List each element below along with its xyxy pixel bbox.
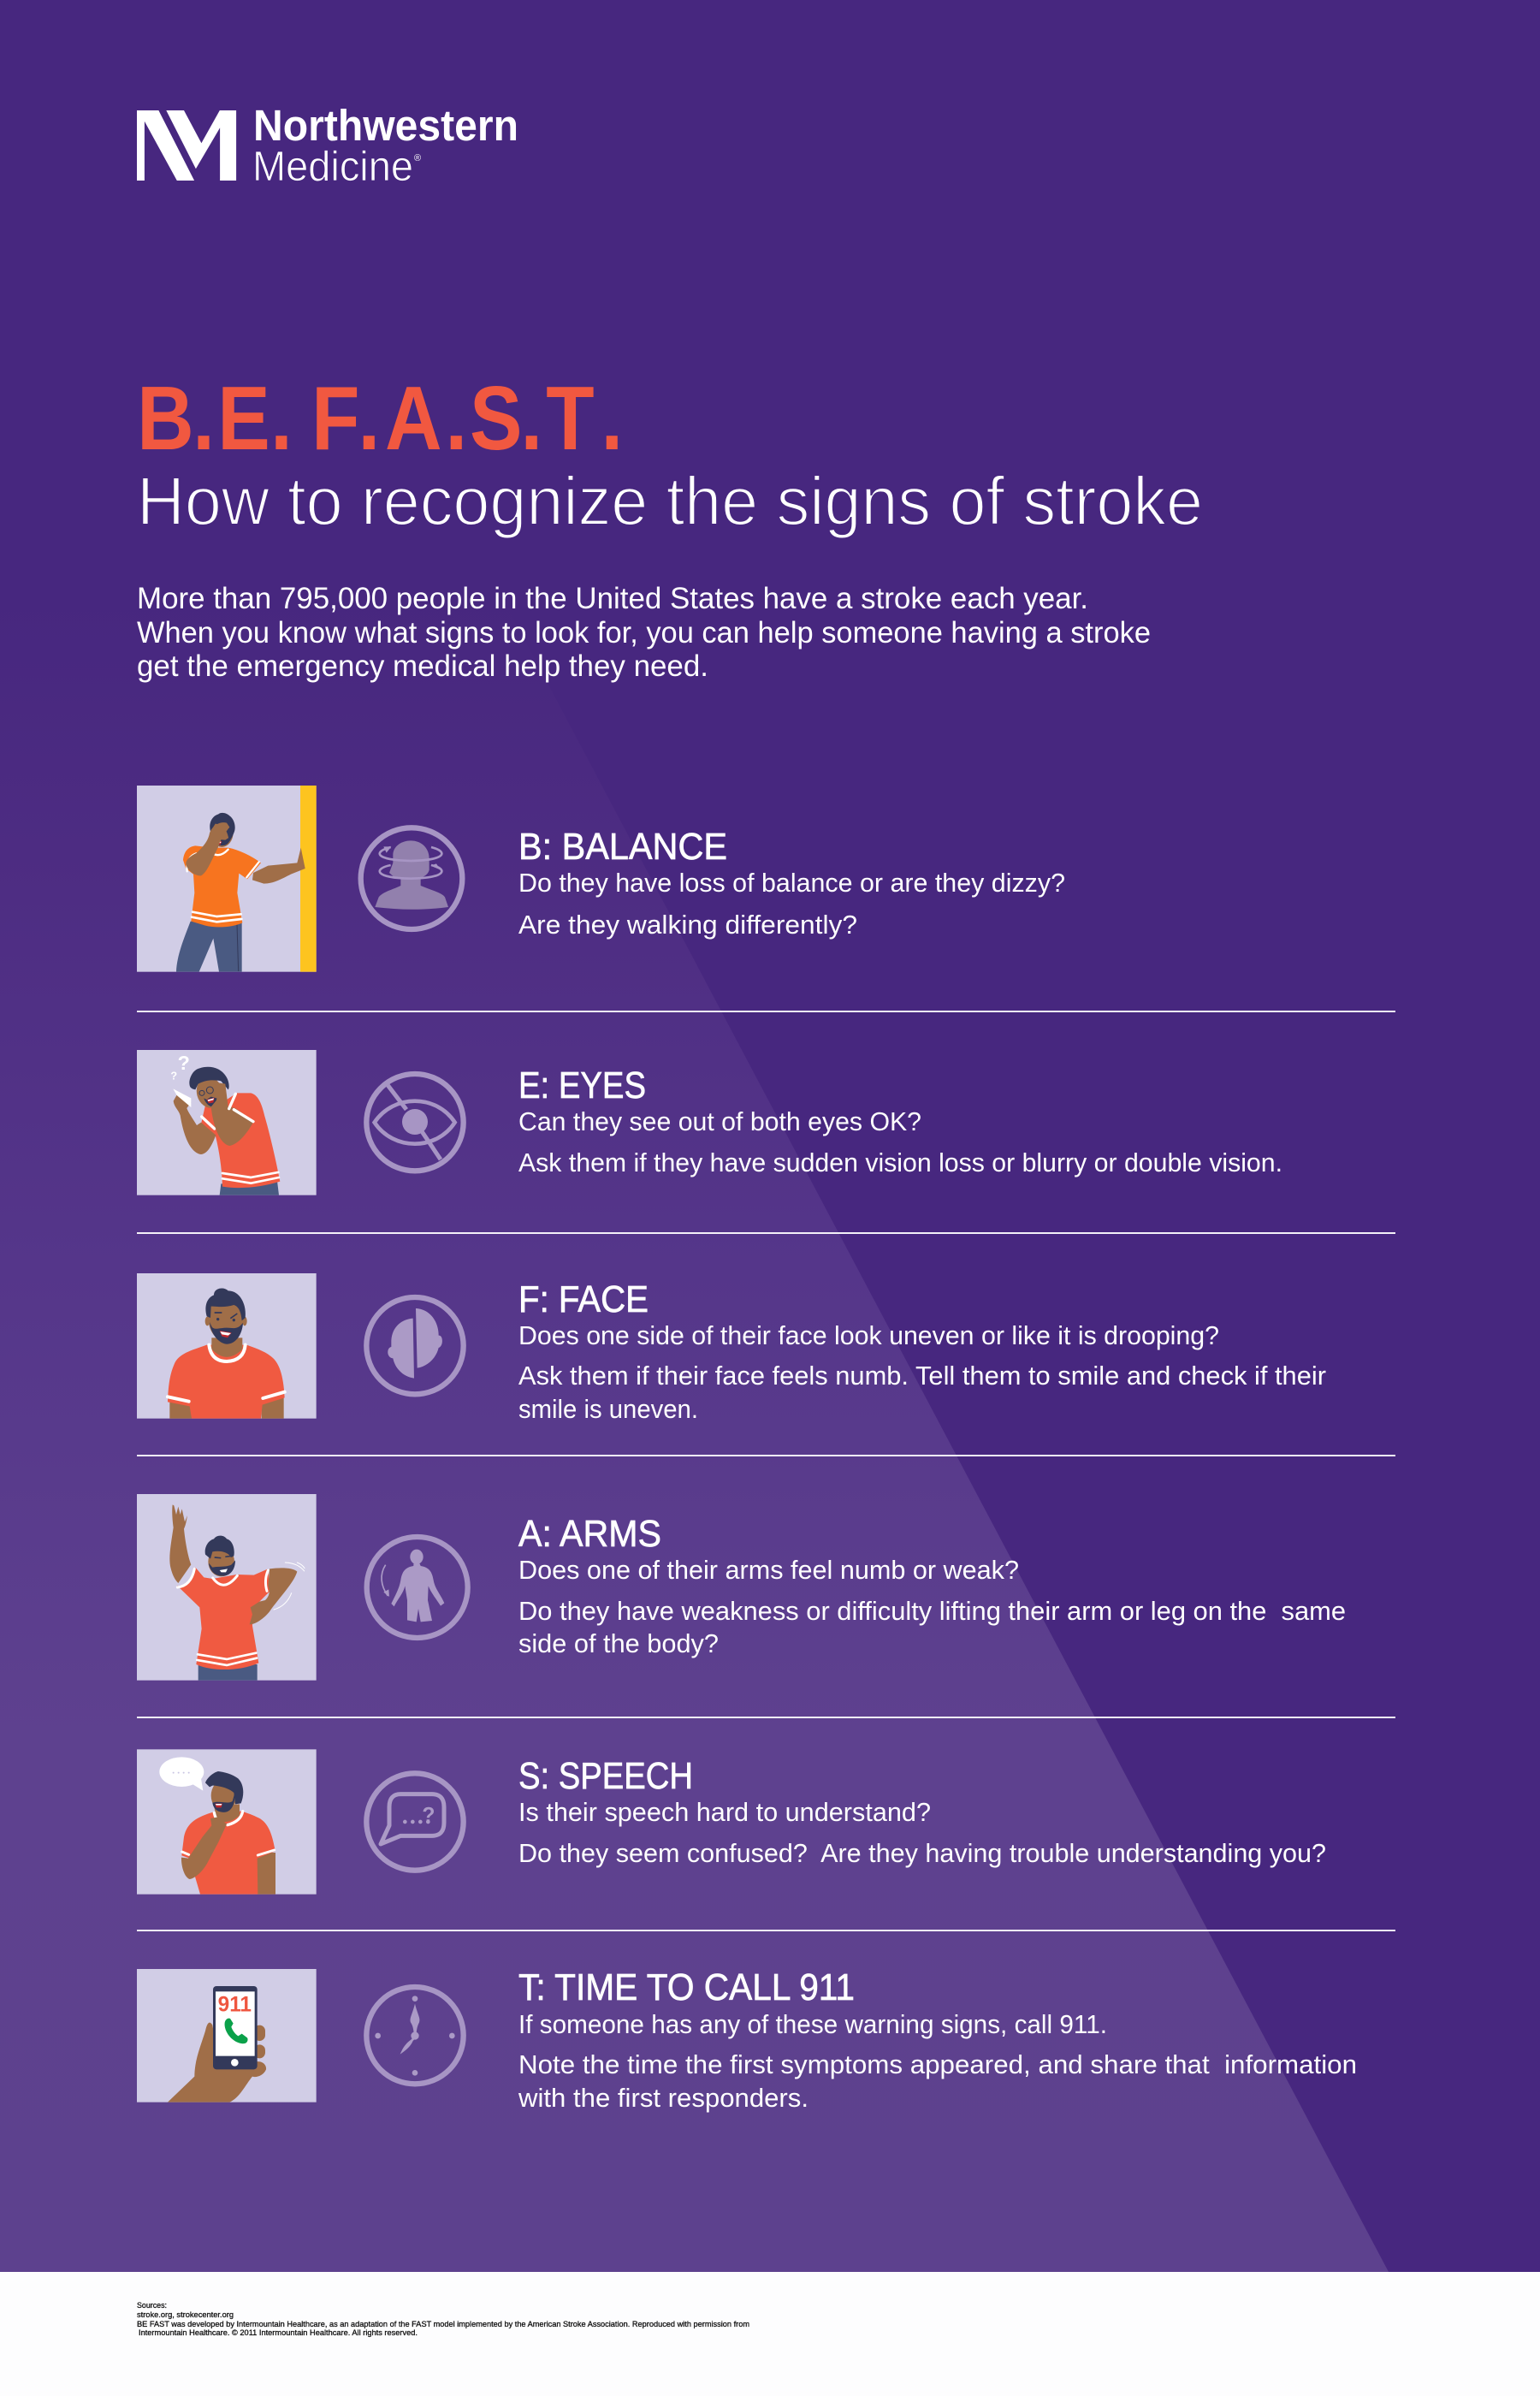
section text: arms: side of the body? bbox=[518, 1628, 719, 1658]
section text: eyes: Ask them if they have sudden vision loss or blurry or double vision. bbox=[518, 1148, 1282, 1177]
icon: clock bbox=[366, 1987, 464, 2084]
section text: eyes bbox=[518, 1065, 1282, 1177]
logo: Northwestern Medicine: Northwestern bbox=[253, 101, 518, 150]
section text: balance: Do they have loss of balance or are they dizzy? bbox=[518, 868, 1065, 898]
panel: eyes illustration: ? bbox=[170, 1070, 177, 1082]
panel: phone illustration bbox=[137, 1969, 317, 2102]
section text: balance: B: BALANCE bbox=[518, 826, 727, 868]
section text: time to call 911: T: TIME TO CALL 911 bbox=[518, 1966, 855, 2008]
panel: phone illustration: 911 bbox=[218, 1994, 252, 2017]
section text: eyes: E: EYES bbox=[518, 1065, 646, 1106]
sources footnote: Sources: bbox=[137, 2301, 167, 2310]
panel: arms illustration bbox=[137, 1494, 317, 1681]
intro text: When you know what signs to look for, you can help someone having a stroke bbox=[137, 616, 1151, 649]
section text: time to call 911: Note the time the first symptoms appeared, and share that information bbox=[518, 2049, 1357, 2079]
section text: arms: A: ARMS bbox=[518, 1513, 661, 1555]
section text: time to call 911: with the first responders. bbox=[518, 2083, 808, 2113]
intro text bbox=[137, 582, 1151, 683]
icon: split face bbox=[366, 1297, 464, 1394]
logo: Northwestern Medicine: Medicine bbox=[252, 144, 413, 190]
subtitle: How to recognize the signs of stroke bbox=[137, 463, 1203, 539]
section text: time to call 911: If someone has any of these warning signs, call 911. bbox=[518, 2009, 1107, 2039]
section text: arms bbox=[518, 1513, 1346, 1658]
section text: eyes: Can they see out of both eyes OK? bbox=[518, 1106, 921, 1136]
sources footnote: BE FAST was developed by Intermountain Healthcare, as an adaptation of the FAST model implemented by the American Stroke Association. Reproduced with permission from bbox=[137, 2320, 749, 2329]
icon: speech bubble bbox=[366, 1773, 464, 1871]
section text: balance: Are they walking differently? bbox=[518, 910, 857, 940]
section text: speech: Do they seem confused? Are they having trouble understanding you? bbox=[518, 1838, 1326, 1868]
panel: eyes illustration bbox=[137, 1050, 317, 1195]
section text: arms: Does one of their arms feel numb or weak? bbox=[518, 1555, 1019, 1585]
intro text: get the emergency medical help they need. bbox=[137, 649, 708, 683]
title: B.E. F.A.S.T. bbox=[137, 368, 623, 469]
section text: face bbox=[518, 1278, 1326, 1424]
divider lines bbox=[137, 1011, 1395, 1931]
intro text: More than 795,000 people in the United States have a stroke each year. bbox=[137, 582, 1088, 615]
section text: speech: S: SPEECH bbox=[518, 1755, 693, 1797]
panel: balance illustration bbox=[137, 786, 317, 972]
section text: time to call 911 bbox=[518, 1966, 1357, 2113]
section text: speech: Is their speech hard to understand? bbox=[518, 1797, 931, 1827]
panel: eyes illustration: ? bbox=[178, 1052, 190, 1074]
icon: speech bubble: ? bbox=[422, 1804, 435, 1827]
logo: Northwestern Medicine: ® bbox=[414, 153, 421, 163]
section text: face: Ask them if their face feels numb. Tell them to smile and check if their bbox=[518, 1361, 1326, 1391]
icon: spinning head bbox=[361, 827, 462, 929]
panel: face illustration bbox=[137, 1273, 317, 1419]
sources footnote: Intermountain Healthcare. © 2011 Intermountain Healthcare. All rights reserved. bbox=[139, 2328, 418, 2338]
section text: face: F: FACE bbox=[518, 1278, 649, 1320]
section text: arms: Do they have weakness or difficulty lifting their arm or leg on the same bbox=[518, 1596, 1346, 1626]
icon: body with moving arm bbox=[367, 1537, 468, 1638]
sources footnote bbox=[137, 2301, 749, 2338]
section text: balance bbox=[518, 826, 1065, 940]
section text: face: Does one side of their face look uneven or like it is drooping? bbox=[518, 1320, 1219, 1350]
section text: face: smile is uneven. bbox=[518, 1394, 698, 1424]
section text: speech bbox=[518, 1755, 1326, 1868]
panel: speech illustration bbox=[137, 1749, 317, 1895]
sources footnote: stroke.org, strokecenter.org bbox=[137, 2310, 234, 2320]
logo: Northwestern Medicine bbox=[137, 101, 518, 190]
icon: eye with slash bbox=[366, 1074, 464, 1171]
